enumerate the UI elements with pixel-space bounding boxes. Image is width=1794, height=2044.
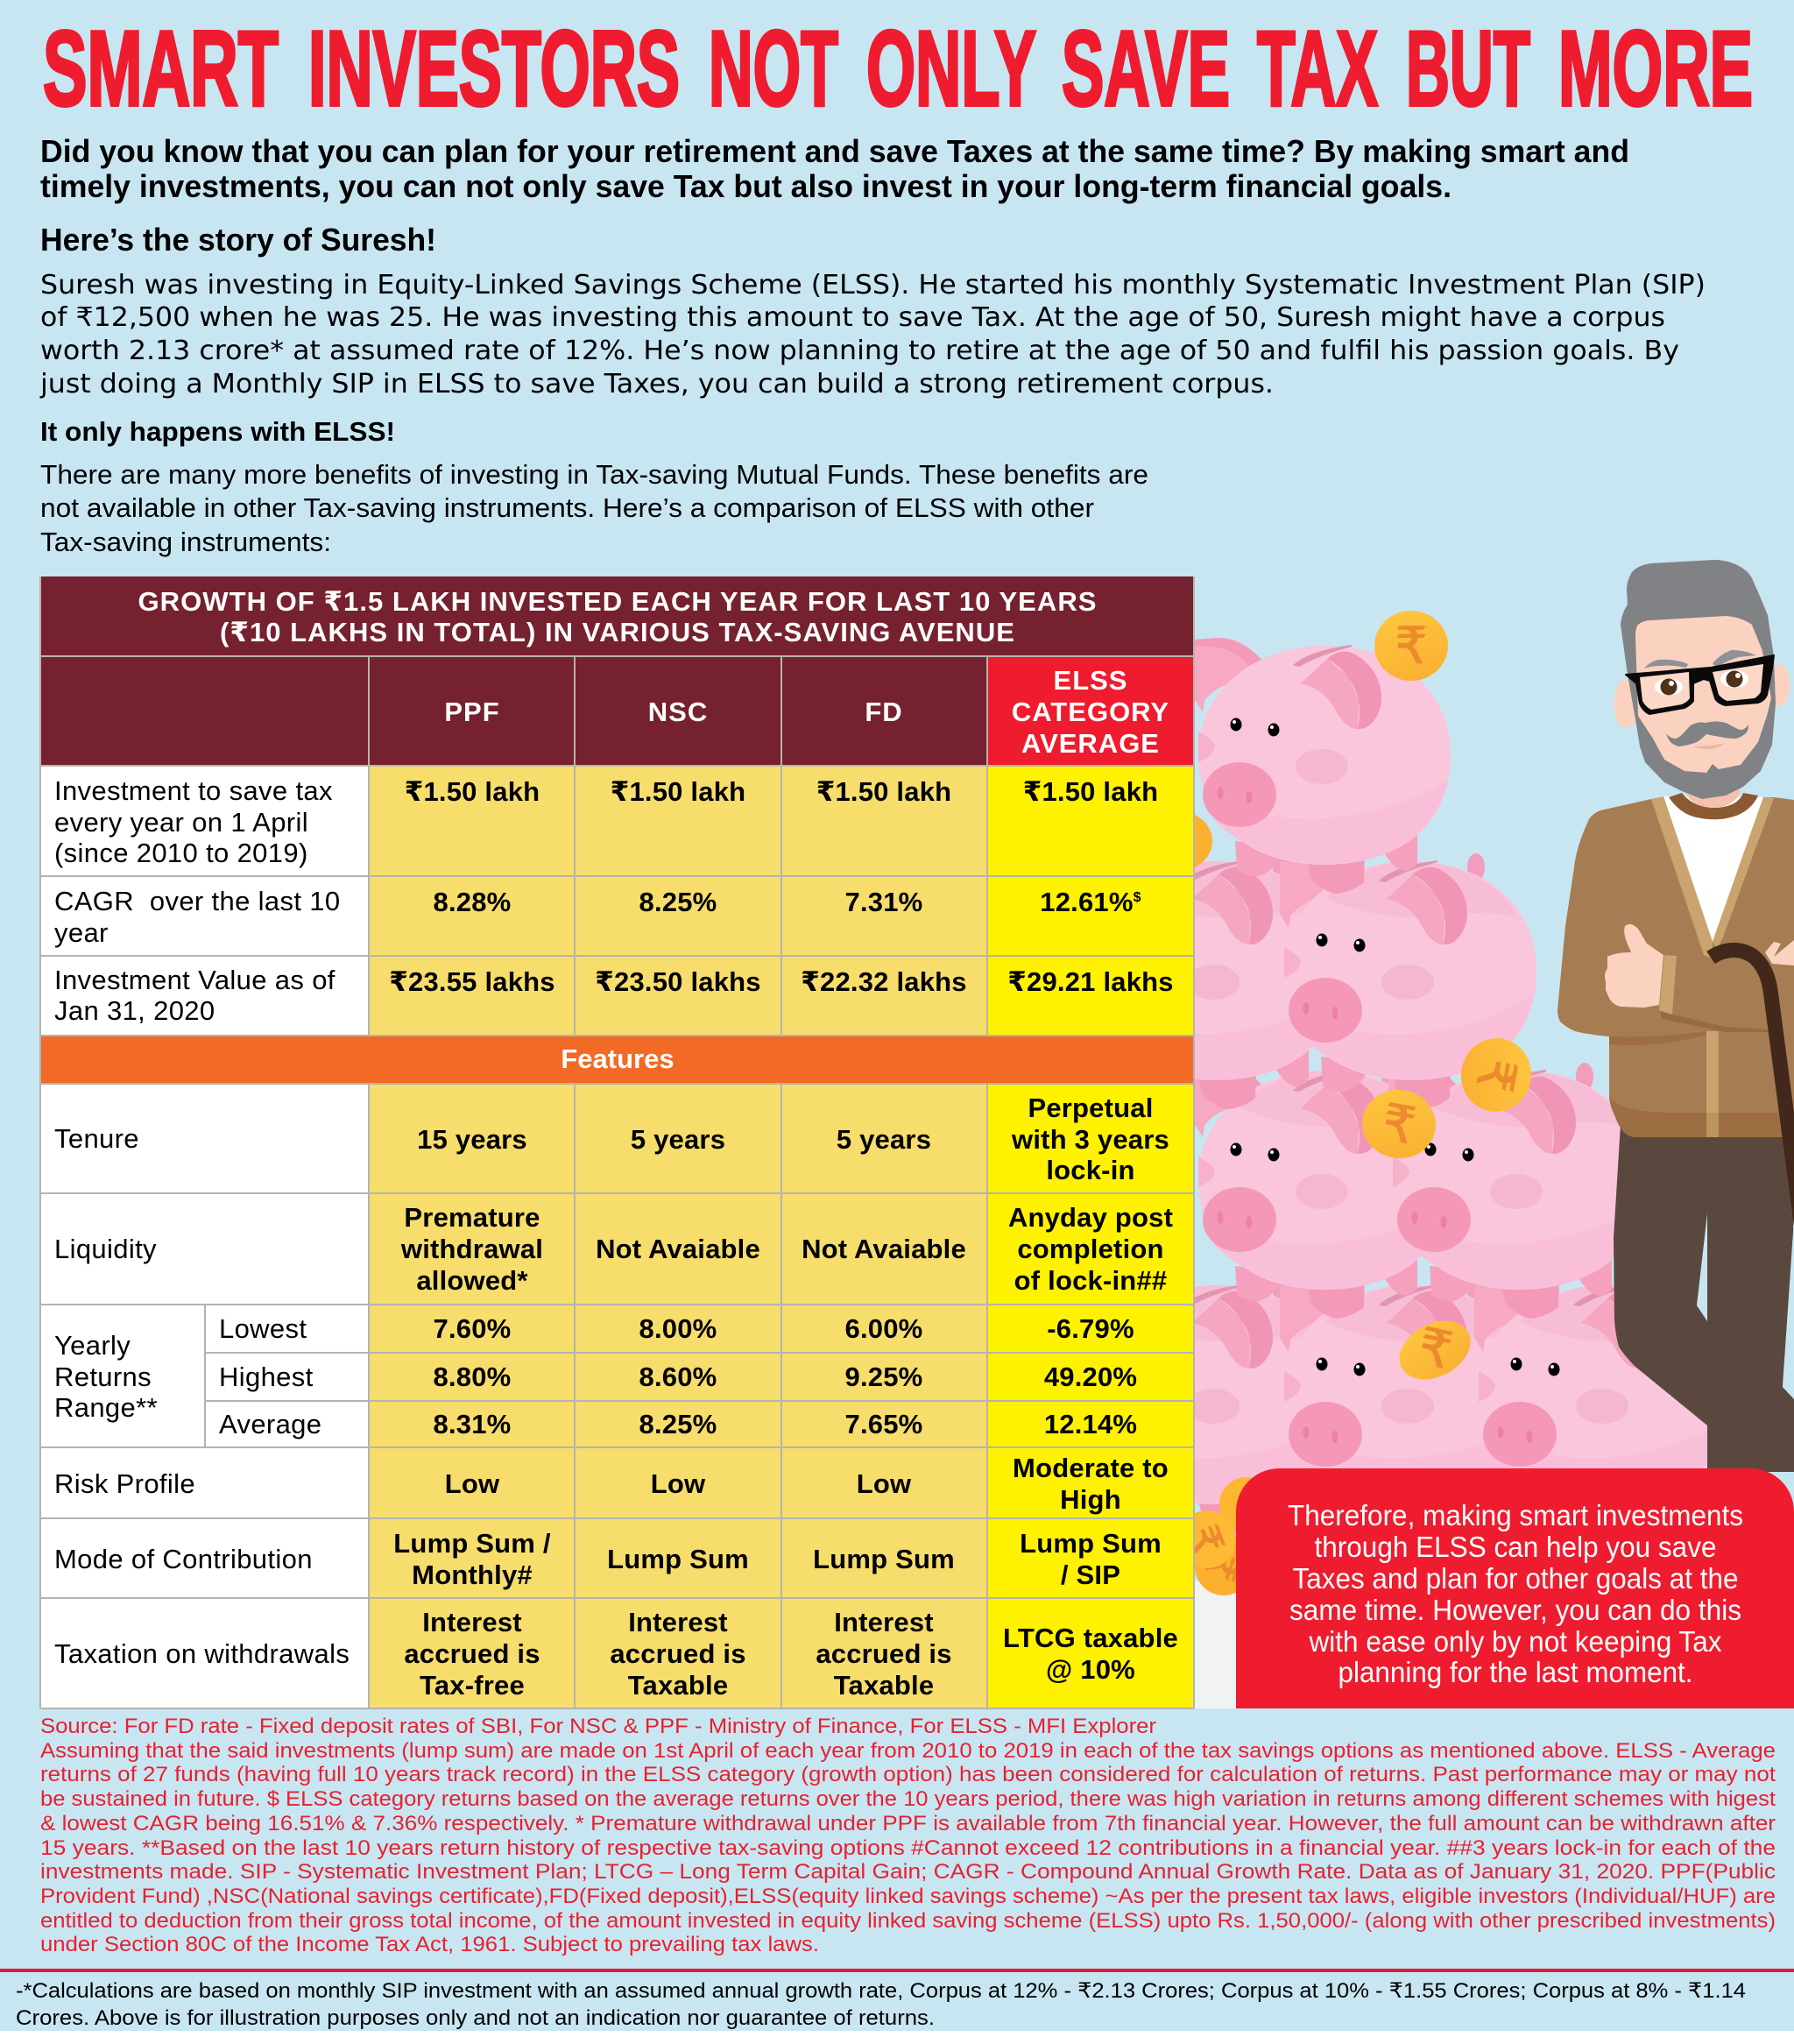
- column headers: NSC: [648, 697, 708, 727]
- row: liquidity: Anyday post: [1008, 1202, 1173, 1233]
- highest returns: 8.80%: [434, 1361, 511, 1392]
- row: investment to save tax: ₹1.50 lakh: [611, 776, 745, 807]
- pig row 3 left: [1194, 1063, 1451, 1319]
- coin pile: ₹: [1196, 1545, 1248, 1587]
- source and disclaimer text: Source: For FD rate - Fixed deposit rates of SBI, For NSC & PPF - Ministry of Finance, For ELSS - MFI Explorer: [40, 1715, 1156, 1738]
- column headers: ELSS: [1054, 665, 1127, 696]
- row: mode of contribution: Mode of Contribution: [54, 1544, 313, 1574]
- row: taxation on withdrawals: accrued is: [610, 1638, 746, 1669]
- story paragraph: just doing a Monthly SIP in ELSS to save Taxes, you can build a strong retirement corpus.: [39, 369, 1274, 400]
- average returns: 8.25%: [639, 1409, 717, 1439]
- story paragraph: of ₹12,500 when he was 25. He was investing this amount to save Tax. At the age of 50, Suresh might have a corpus: [40, 302, 1665, 333]
- row: risk profile: Moderate to: [1013, 1453, 1169, 1483]
- row: risk profile: Low: [651, 1468, 706, 1499]
- gap between legs: [1697, 1213, 1707, 1321]
- row: tenure: with 3 years: [1011, 1124, 1169, 1155]
- row: investment to save tax: ₹1.50 lakh: [1023, 776, 1158, 807]
- lowest returns: 8.00%: [639, 1313, 717, 1344]
- sleeve shadow: [1660, 1012, 1768, 1032]
- row: mode of contribution: Lump Sum: [607, 1544, 749, 1574]
- row: CAGR: 8.28%: [434, 887, 511, 917]
- row: liquidity: [54, 1202, 1173, 1296]
- callout: conclusion: Taxes and plan for other goals at the: [1293, 1562, 1738, 1595]
- pig row 2 right: [1280, 853, 1536, 1109]
- lowest returns: 7.60%: [434, 1313, 511, 1344]
- row: CAGR: [54, 886, 1141, 948]
- story paragraph: [39, 270, 1706, 400]
- source and disclaimer text: [40, 1715, 1776, 1956]
- row: risk profile: [54, 1453, 1169, 1515]
- pig row 4 right: [1474, 1277, 1731, 1533]
- row: liquidity: Not Avaiable: [596, 1234, 760, 1264]
- source and disclaimer text: Provident Fund) ,NSC(National savings certificate),FD(Fixed deposit),ELSS(equity linked savings scheme) ~As per the present tax laws, eligible investors (Individual/HUF) are: [40, 1885, 1776, 1908]
- thumbs-up hand: [1605, 924, 1663, 1008]
- coin hidden left: [1146, 811, 1212, 871]
- illustration: old man with cane: [1557, 560, 1794, 1472]
- row: investment value: Investment Value as of: [54, 965, 335, 995]
- row: investment to save tax: (since 2010 to 2019): [54, 838, 308, 868]
- row: investment value: Jan 31, 2020: [54, 995, 215, 1026]
- row: taxation on withdrawals: Interest: [422, 1607, 522, 1637]
- row: CAGR: 8.25%: [639, 887, 717, 917]
- row: taxation on withdrawals: [54, 1607, 1178, 1701]
- coin pile: [1170, 1477, 1274, 1603]
- heading: story of Suresh: Here’s the story of Suresh!: [40, 222, 436, 258]
- callout: conclusion: same time. However, you can do this: [1289, 1594, 1741, 1626]
- coin flat: ₹: [1414, 1318, 1457, 1380]
- features band: Features: [561, 1043, 675, 1074]
- coin top: ₹: [1395, 618, 1427, 675]
- story paragraph: worth 2.13 crore* at assumed rate of 12%. He’s now planning to retire at the age of 50 and fulfil his passion goals. By: [40, 336, 1679, 366]
- row: taxation on withdrawals: @ 10%: [1046, 1654, 1135, 1685]
- waist shadow: [1609, 1031, 1719, 1045]
- intro text: timely investments, you can not only save Tax but also invest in your long-term financial goals.: [40, 168, 1451, 204]
- row: risk profile: Risk Profile: [54, 1468, 195, 1499]
- row: investment to save tax: every year on 1 April: [54, 807, 308, 838]
- other hand: [1765, 940, 1794, 965]
- benefits paragraph: not available in other Tax-saving instruments. Here’s a comparison of ELSS with other: [40, 492, 1094, 523]
- row: tenure: [54, 1093, 1169, 1185]
- highest returns: 49.20%: [1044, 1361, 1137, 1392]
- benefits paragraph: Tax-saving instruments:: [40, 527, 331, 557]
- features band: [40, 1036, 1194, 1084]
- column headers: [40, 656, 1194, 766]
- cell fills: [40, 766, 1194, 1708]
- row: investment value: ₹29.21 lakhs: [1007, 966, 1174, 997]
- row: taxation on withdrawals: Taxation on withdrawals: [54, 1638, 350, 1669]
- row: taxation on withdrawals: Taxable: [834, 1670, 934, 1701]
- intro text: [40, 133, 1629, 204]
- callout: conclusion: through ELSS can help you save: [1314, 1531, 1717, 1563]
- blue gap right of leg: [1783, 1233, 1794, 1399]
- row group: yearly returns range: [54, 1313, 1137, 1439]
- footnote: [16, 1979, 1746, 2030]
- average returns: 8.31%: [434, 1409, 511, 1439]
- row: taxation on withdrawals: accrued is: [816, 1638, 952, 1669]
- row: tenure: Tenure: [54, 1123, 139, 1154]
- source and disclaimer text: investments made. SIP - Systematic Investment Plan; LTCG – Long Term Capital Gain; CAGR - Compound Annual Growth Rate. Data as of January 31, 2020. PPF(Public: [40, 1860, 1776, 1884]
- highest returns: Highest: [219, 1361, 314, 1392]
- row: liquidity: completion: [1017, 1234, 1164, 1264]
- row: investment value: ₹23.50 lakhs: [595, 966, 761, 997]
- row: mode of contribution: [54, 1528, 1162, 1590]
- row: liquidity: allowed*: [416, 1265, 528, 1296]
- lowest returns: Lowest: [219, 1313, 307, 1344]
- table title bar: [40, 576, 1194, 656]
- callout: conclusion: with ease only by not keeping Tax: [1309, 1625, 1722, 1658]
- row: CAGR: year: [54, 917, 109, 948]
- row: investment value: [54, 965, 1174, 1026]
- row group: yearly returns range: Range**: [54, 1392, 158, 1423]
- table title bar: (₹10 LAKHS IN TOTAL) IN VARIOUS TAX-SAVING AVENUE: [220, 617, 1015, 647]
- trousers: [1614, 1124, 1794, 1472]
- title: [43, 9, 1753, 128]
- row: tenure: 15 years: [417, 1124, 527, 1155]
- cardigan: [1557, 797, 1794, 1137]
- eyebrows: [1644, 650, 1756, 668]
- row: CAGR: 7.31%: [845, 887, 922, 917]
- row: taxation on withdrawals: Interest: [834, 1607, 934, 1637]
- source and disclaimer text: Assuming that the said investments (lump sum) are made on 1st April of each year from 2010 to 2019 in each of the tax savings options as mentioned above. ELSS - Average: [40, 1739, 1776, 1763]
- lowest returns: 6.00%: [845, 1313, 922, 1344]
- row: risk profile: High: [1060, 1484, 1121, 1515]
- row: taxation on withdrawals: Interest: [628, 1607, 728, 1637]
- source and disclaimer text: & lowest CAGR being 16.51% & 7.36% respectively. * Premature withdrawal under PPF is available from 7th financial year. However, the full amount can be withdrawn after: [40, 1812, 1776, 1835]
- pig row 3 right: [1388, 1063, 1645, 1319]
- title: SMART: [43, 9, 279, 128]
- title: NOT: [709, 9, 838, 128]
- callout: conclusion: Therefore, making smart investments: [1288, 1499, 1743, 1531]
- table title bar: GROWTH OF ₹1.5 LAKH INVESTED EACH YEAR FOR LAST 10 YEARS: [138, 586, 1097, 617]
- average returns: 7.65%: [845, 1409, 922, 1439]
- average returns: [219, 1409, 1137, 1439]
- intro text: Did you know that you can plan for your retirement and save Taxes at the same time? By making smart and: [40, 133, 1629, 169]
- pale floor patch: [1191, 1581, 1244, 1708]
- row: liquidity: Liquidity: [54, 1234, 157, 1264]
- row: CAGR: 12.61%: [1040, 887, 1134, 917]
- coin flat: [1386, 1303, 1483, 1396]
- row: investment to save tax: Investment to save tax: [54, 775, 333, 806]
- column headers: FD: [865, 697, 903, 727]
- row group: yearly returns range: Yearly: [54, 1330, 131, 1361]
- row: investment to save tax: [54, 775, 1158, 868]
- title: ONLY: [866, 9, 1036, 128]
- pig row 4 left: [1085, 1277, 1342, 1533]
- benefits paragraph: [40, 459, 1148, 557]
- coin middle: [1357, 1084, 1441, 1164]
- lapel left: [1651, 796, 1713, 958]
- average returns: Average: [219, 1409, 321, 1439]
- comparison table: [40, 576, 1194, 1708]
- lowest returns: -6.79%: [1047, 1313, 1134, 1344]
- average returns: 12.14%: [1044, 1409, 1137, 1439]
- row: investment value: ₹22.32 lakhs: [801, 966, 967, 997]
- highest returns: 9.25%: [845, 1361, 922, 1392]
- row: CAGR: CAGR over the last 10: [54, 886, 340, 916]
- title: INVESTORS: [308, 9, 680, 128]
- title: BUT: [1406, 9, 1530, 128]
- column headers: CATEGORY: [1012, 697, 1169, 727]
- column headers: AVERAGE: [1021, 728, 1160, 759]
- lowest returns: [219, 1313, 1134, 1344]
- illustration: piggy banks stack: [1085, 638, 1731, 1708]
- source and disclaimer text: be sustained in future. $ ELSS category returns based on the average returns over the 10 years period, there was high variation in returns among different schemes with higest: [40, 1787, 1776, 1811]
- row: mode of contribution: Lump Sum /: [393, 1528, 551, 1559]
- row: mode of contribution: Lump Sum: [813, 1544, 955, 1574]
- row: investment to save tax: ₹1.50 lakh: [816, 776, 951, 807]
- row: taxation on withdrawals: Taxable: [628, 1670, 728, 1701]
- row: liquidity: of lock-in##: [1014, 1265, 1167, 1296]
- title: TAX: [1257, 9, 1378, 128]
- footnote: Crores. Above is for illustration purposes only and not an indication nor guarantee of returns.: [16, 2006, 935, 2030]
- hair and beard: [1621, 560, 1776, 799]
- row: liquidity: Not Avaiable: [802, 1234, 966, 1264]
- coin middle: ₹: [1378, 1093, 1420, 1156]
- heading: only with ELSS: It only happens with ELSS!: [40, 416, 395, 447]
- source and disclaimer text: entitled to deduction from their gross total income, of the amount invested in equity linked saving scheme (ELSS) upto Rs. 1,50,000/- (along with other prescribed investments): [40, 1909, 1776, 1933]
- row: risk profile: Low: [445, 1468, 500, 1499]
- row: mode of contribution: Lump Sum: [1020, 1528, 1162, 1559]
- source and disclaimer text: 15 years. **Based on the last 10 years return history of respective tax-saving options #Cannot exceed 12 contributions in a financial year. ##3 years lock-in for each of the: [40, 1836, 1776, 1860]
- collar: [1669, 793, 1758, 819]
- row: liquidity: Premature: [404, 1202, 540, 1233]
- pig row 4 middle: [1280, 1277, 1536, 1533]
- row: risk profile: Low: [857, 1468, 912, 1499]
- row: investment to save tax: ₹1.50 lakh: [405, 776, 540, 807]
- cuff: [1659, 955, 1677, 1015]
- ears: [1614, 664, 1790, 728]
- row: taxation on withdrawals: LTCG taxable: [1003, 1623, 1178, 1653]
- coin top: [1374, 611, 1448, 681]
- callout: conclusion: [1236, 1468, 1794, 1708]
- benefits paragraph: There are many more benefits of investing in Tax-saving Mutual Funds. These benefits are: [40, 459, 1148, 490]
- title: SAVE: [1062, 9, 1230, 128]
- column headers: PPF: [444, 697, 500, 727]
- cardigan hem: [1609, 1098, 1794, 1137]
- row: mode of contribution: / SIP: [1061, 1560, 1120, 1590]
- glasses: [1626, 655, 1774, 714]
- button placket: [1706, 1031, 1719, 1113]
- pig row 2 left: [1085, 853, 1342, 1109]
- coin right: ₹: [1465, 1054, 1527, 1096]
- row: CAGR: $: [1134, 890, 1141, 905]
- lapel right: [1713, 797, 1774, 949]
- source and disclaimer text: under Section 80C of the Income Tax Act, 1961. Subject to prevailing tax laws.: [40, 1933, 819, 1956]
- row: taxation on withdrawals: accrued is: [404, 1638, 540, 1669]
- coin pile: ₹: [1179, 1519, 1232, 1560]
- row: mode of contribution: Monthly#: [412, 1560, 533, 1590]
- row group: yearly returns range: Returns: [54, 1361, 152, 1392]
- mouth: [1692, 743, 1726, 749]
- footnote: -*Calculations are based on monthly SIP investment with an assumed annual growth rate, Corpus at 12% - ₹2.13 Crores; Corpus at 10% - ₹1.55 Crores; Corpus at 8% - ₹1.14: [16, 1979, 1746, 2003]
- pig top: [1194, 638, 1451, 894]
- source and disclaimer text: returns of 27 funds (having full 10 years track record) in the ELSS category (growth option) has been considered for calculation of returns. Past performance may or may not: [40, 1763, 1776, 1786]
- row: investment value: ₹23.55 lakhs: [389, 966, 555, 997]
- row: tenure: Perpetual: [1028, 1093, 1154, 1123]
- row: tenure: 5 years: [631, 1124, 725, 1155]
- row: tenure: 5 years: [837, 1124, 931, 1155]
- coins: [1146, 611, 1537, 1603]
- callout: conclusion: planning for the last moment.: [1338, 1656, 1692, 1688]
- coin right: [1455, 1033, 1537, 1117]
- highest returns: [219, 1361, 1137, 1392]
- highest returns: 8.60%: [639, 1361, 717, 1392]
- neck: [1687, 784, 1741, 808]
- cane: [1711, 950, 1794, 1229]
- story paragraph: Suresh was investing in Equity-Linked Savings Scheme (ELSS). He started his monthly Systematic Investment Plan (SIP): [40, 270, 1706, 301]
- row: liquidity: withdrawal: [400, 1234, 543, 1264]
- row: taxation on withdrawals: Tax-free: [420, 1670, 525, 1701]
- t-shirt: [1663, 796, 1763, 942]
- row: tenure: lock-in: [1046, 1155, 1135, 1185]
- moustache: [1666, 722, 1748, 746]
- face: [1635, 616, 1771, 773]
